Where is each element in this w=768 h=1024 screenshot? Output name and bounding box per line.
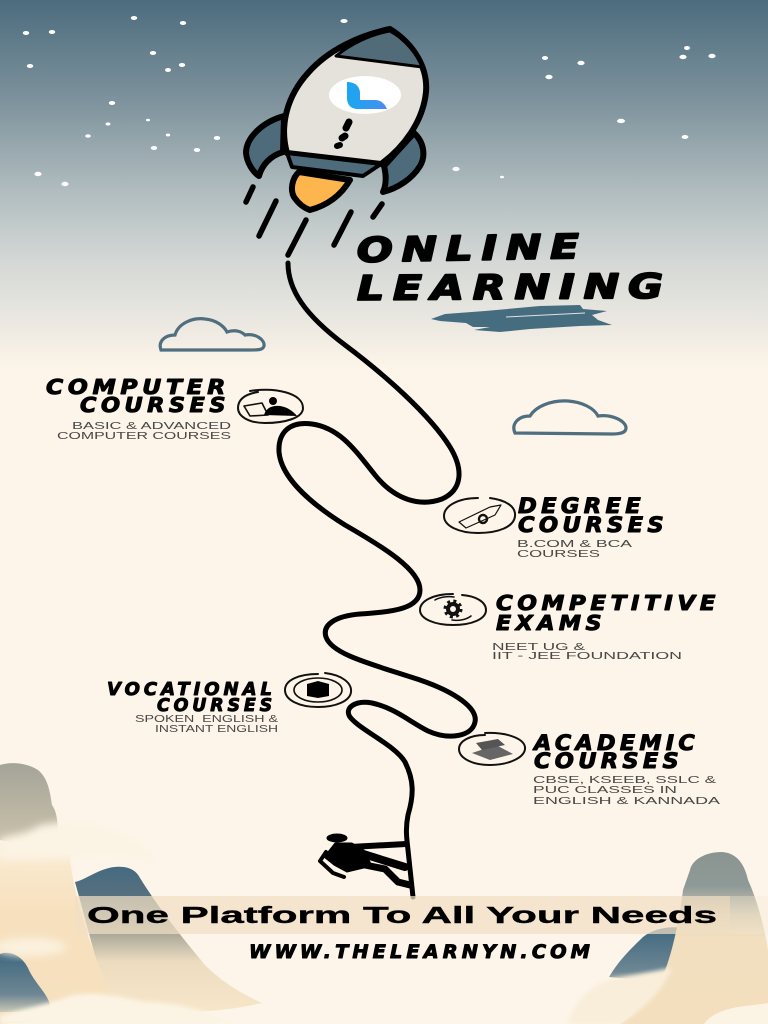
corner cloud <box>704 1003 768 1024</box>
stars <box>23 16 716 186</box>
icon: open box <box>285 673 351 707</box>
right mountains <box>568 852 768 1024</box>
blue hill <box>609 927 690 990</box>
description: IIT - JEE FOUNDATION <box>492 650 682 662</box>
description: INSTANT ENGLISH <box>155 723 278 735</box>
title: ONLINE <box>356 227 588 271</box>
description <box>517 538 632 560</box>
heading: ACADEMIC <box>532 731 699 755</box>
heading: COURSES <box>518 513 668 537</box>
winding path <box>279 263 475 897</box>
icon: gear with arrows <box>420 594 486 625</box>
description: PUC CLASSES IN <box>533 784 677 796</box>
competitive exams block <box>420 591 720 662</box>
heading: COURSES <box>534 749 683 773</box>
icon: books <box>459 733 525 765</box>
blue mountain <box>75 867 262 1013</box>
rocket base band <box>287 153 381 176</box>
vocational courses block <box>107 673 351 735</box>
tagline band <box>75 896 768 934</box>
heading <box>46 375 230 417</box>
tagline: One Platform To All Your Needs <box>87 902 717 928</box>
description: NEET UG & <box>492 641 585 653</box>
sky gradient background <box>0 0 768 370</box>
heading: COURSES <box>157 695 276 716</box>
degree courses block <box>444 494 668 560</box>
left mountains <box>0 763 262 1024</box>
heading <box>496 591 720 635</box>
description: SPOKEN ENGLISH & <box>135 713 278 725</box>
icon: right fin <box>383 133 423 192</box>
description <box>57 420 232 442</box>
heading: EXAMS <box>496 611 606 635</box>
climber silhouette <box>320 834 410 885</box>
description: COURSES <box>517 548 600 560</box>
heading: DEGREE <box>518 494 645 518</box>
icon: laptop learner <box>238 390 303 423</box>
gray peak <box>0 763 58 860</box>
title <box>356 227 672 309</box>
description <box>492 641 682 662</box>
academic courses block <box>459 731 720 807</box>
heading: COMPETITIVE <box>496 591 720 615</box>
description <box>533 774 720 807</box>
description: COMPUTER COURSES <box>57 430 231 442</box>
heading <box>107 679 276 716</box>
mist cloud <box>0 938 66 956</box>
bottom cloud <box>0 994 235 1024</box>
heading <box>532 731 699 773</box>
heading: COURSES <box>80 393 230 417</box>
front cloud <box>568 968 672 1024</box>
description: BASIC & ADVANCED <box>72 420 232 432</box>
description: CBSE, KSEEB, SSLC & <box>533 774 716 786</box>
rocket nose <box>336 31 422 67</box>
title: LEARNING <box>357 267 672 309</box>
description: B.COM & BCA <box>517 538 632 550</box>
porthole dots <box>337 122 349 146</box>
cloud left <box>160 319 264 350</box>
heading <box>518 494 668 537</box>
exhaust dashes <box>246 187 382 255</box>
description <box>135 713 278 735</box>
heading: VOCATIONAL <box>107 679 276 700</box>
logo badge <box>329 76 401 114</box>
rocket <box>246 29 426 255</box>
peak and tan cliff <box>620 852 768 1024</box>
cloud right <box>514 401 626 434</box>
lower blue hill <box>0 953 50 1012</box>
icon: diploma <box>444 498 515 533</box>
computer courses block <box>46 375 303 442</box>
website: WWW.THELEARNYN.COM <box>249 941 594 963</box>
heading: COMPUTER <box>46 375 230 399</box>
icon: flame <box>292 172 350 210</box>
rocket body <box>284 29 426 164</box>
upper cloud <box>0 823 155 862</box>
brush stroke under title <box>431 305 612 332</box>
description: ENGLISH & KANNADA <box>533 795 720 807</box>
tan cliff <box>0 840 122 1024</box>
icon: left fin <box>246 116 284 176</box>
